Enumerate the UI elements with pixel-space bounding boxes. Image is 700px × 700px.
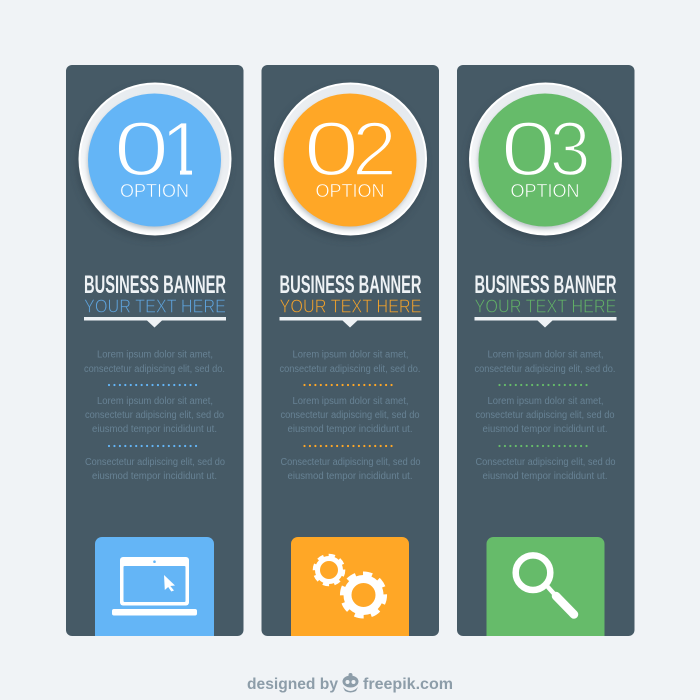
text block 3 (280, 457, 420, 482)
number 02: 2 (352, 106, 397, 192)
footer credit: designed by (247, 676, 338, 693)
text block 3 (476, 457, 616, 482)
text block 1 (280, 350, 420, 375)
heading: BUSINESS BANNER (280, 271, 422, 299)
text block 1: consectetur adipiscing elit, sed do. (280, 364, 420, 375)
dotted separator (109, 384, 201, 386)
text block 1: Lorem ipsum dolor sit amet, (488, 350, 604, 360)
text block 2: Lorem ipsum dolor sit amet, (488, 396, 604, 407)
icon tile: gears (291, 537, 409, 636)
number 01: 0 (114, 106, 169, 192)
text block 3: Consectetur adipiscing elit, sed do (280, 457, 420, 468)
icon: freepik logo (342, 673, 358, 692)
text block 3 (85, 457, 225, 482)
panel: option 01 (66, 65, 244, 636)
text block 1: consectetur adipiscing elit, sed do. (474, 364, 616, 375)
badge: 02 option (272, 82, 427, 239)
number 03 (501, 106, 591, 192)
text block 1 (474, 350, 616, 375)
label option: OPTION (120, 180, 189, 201)
number 03: 0 (501, 106, 556, 192)
text block 2: consectetur adipiscing elit, sed do (280, 410, 420, 421)
text block 2 (476, 396, 614, 435)
badge: 01 option (77, 82, 232, 239)
text block 3: eiusmod tempor incididunt ut. (288, 471, 412, 482)
heading: BUSINESS BANNER (84, 271, 226, 299)
text block 2 (85, 396, 224, 435)
text block 1: Lorem ipsum dolor sit amet, (292, 350, 408, 360)
badge: 03 option (468, 82, 622, 239)
label option: OPTION (510, 180, 580, 201)
panel background 01 (66, 65, 244, 636)
icon tile: laptop (95, 537, 214, 636)
dotted separator (109, 445, 201, 447)
label option: OPTION (316, 180, 384, 201)
dotted separator (500, 384, 592, 386)
number 02 (304, 106, 397, 192)
text block 1: consectetur adipiscing elit, sed do. (84, 364, 225, 375)
text block 1 (84, 350, 225, 375)
text block 2 (280, 396, 420, 435)
icon: gears (315, 556, 385, 616)
text block 2: Lorem ipsum dolor sit amet, (292, 396, 408, 407)
footer credit: freepik.com (363, 676, 453, 693)
subheading: YOUR TEXT HERE (84, 296, 226, 316)
footer credit (247, 673, 453, 693)
text block 3: Consectetur adipiscing elit, sed do (85, 457, 225, 468)
text block 2: eiusmod tempor incididunt ut. (288, 424, 412, 435)
icon tile: magnifier (486, 537, 604, 636)
divider with pointer (280, 317, 422, 328)
text block 3: eiusmod tempor incididunt ut. (92, 471, 217, 482)
dotted separator (304, 384, 396, 386)
text block 3: Consectetur adipiscing elit, sed do (476, 457, 616, 468)
panel: option 03 (457, 65, 634, 636)
panel background 02 (262, 65, 439, 636)
divider with pointer (474, 317, 616, 328)
divider with pointer (84, 317, 226, 328)
text block 3: eiusmod tempor incididunt ut. (482, 471, 608, 482)
icon: magnifier (516, 555, 574, 614)
text block 2: eiusmod tempor incididunt ut. (92, 424, 217, 435)
dotted separator (500, 445, 592, 447)
dotted separator (304, 445, 396, 447)
panel: option 02 (262, 65, 439, 636)
subheading: YOUR TEXT HERE (280, 296, 422, 316)
number 01: 1 (161, 106, 204, 192)
icon: laptop (112, 557, 197, 616)
text block 1: Lorem ipsum dolor sit amet, (97, 350, 213, 360)
panel background 03 (457, 65, 634, 636)
text block 2: consectetur adipiscing elit, sed do (476, 410, 614, 421)
text block 2: Lorem ipsum dolor sit amet, (97, 396, 213, 407)
text block 2: consectetur adipiscing elit, sed do (85, 410, 224, 421)
text block 2: eiusmod tempor incididunt ut. (482, 424, 608, 435)
number 01 (118, 122, 192, 175)
number 03: 3 (549, 106, 591, 192)
subheading: YOUR TEXT HERE (474, 296, 616, 316)
number 02: 0 (304, 106, 359, 192)
